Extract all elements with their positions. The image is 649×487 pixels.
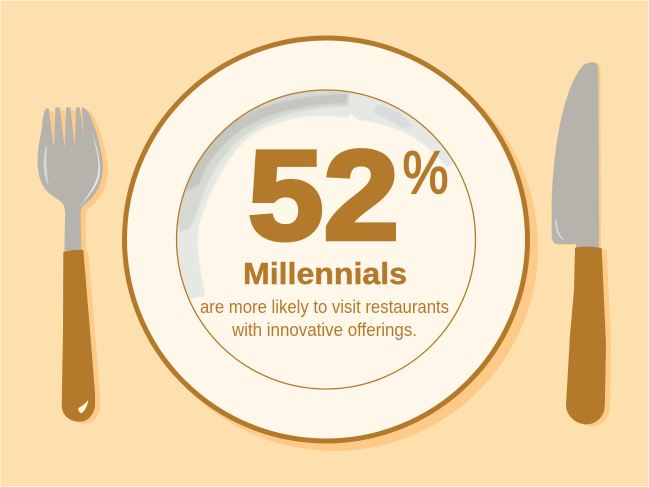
statistic: 52: 52 — [248, 124, 399, 266]
plate — [124, 38, 538, 451]
plate smear — [177, 90, 454, 300]
description text — [200, 296, 449, 340]
description text: are more likely to visit restaurants — [200, 296, 449, 317]
inner plate ring — [176, 90, 476, 389]
icon: fork — [38, 108, 107, 424]
percent sign: % — [402, 139, 448, 206]
fork handle — [62, 250, 100, 424]
fork highlights — [44, 133, 100, 208]
description text: with innovative offerings. — [231, 319, 417, 340]
knife highlight — [555, 219, 565, 241]
heading: Millennials: Millennials — [243, 256, 407, 291]
knife handle — [566, 246, 611, 426]
icon: knife — [552, 62, 611, 426]
